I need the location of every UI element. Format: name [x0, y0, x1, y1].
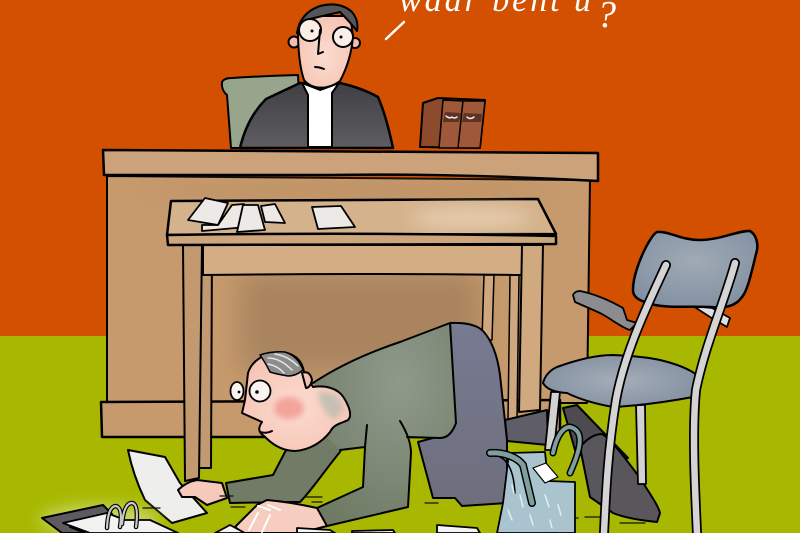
man cheek blush	[274, 397, 304, 419]
bench plinth	[101, 400, 560, 437]
sweater torso and near arm	[313, 323, 456, 526]
table top surface	[167, 199, 556, 235]
chair left tube	[604, 265, 666, 533]
man hair streaks	[268, 354, 298, 373]
judge ears	[288, 36, 360, 48]
trouser: main leg	[418, 323, 507, 506]
bench body	[107, 176, 590, 403]
chair right tube	[694, 263, 735, 533]
speech: judge question	[386, 0, 616, 39]
man head	[242, 352, 350, 451]
bag	[490, 427, 580, 533]
binder on floor	[40, 503, 178, 533]
man neck shading	[318, 392, 344, 420]
table rail	[203, 245, 522, 275]
judge face	[298, 16, 353, 88]
table front edge	[167, 234, 556, 245]
chair rear legs	[545, 392, 646, 484]
law books	[420, 98, 485, 148]
shadow under table	[240, 272, 480, 372]
man hair	[260, 352, 303, 376]
bag front strap	[490, 453, 532, 503]
bench top plank	[103, 150, 598, 181]
far arm	[226, 430, 345, 503]
man glasses	[230, 380, 270, 402]
bench shading	[150, 183, 550, 197]
background: orange wall	[0, 0, 800, 337]
near hand fingers	[249, 505, 280, 532]
bag contents	[533, 463, 558, 483]
judge white bib	[302, 83, 339, 147]
judge figure	[240, 4, 393, 148]
papers on table	[188, 198, 355, 232]
judge bench	[101, 150, 598, 437]
floor motion marks	[143, 496, 645, 523]
man mouth	[260, 431, 272, 433]
bag body	[497, 452, 575, 533]
judge gown	[240, 83, 393, 148]
chair back	[633, 231, 757, 307]
binder pages	[63, 513, 178, 533]
background: green floor	[0, 336, 800, 533]
papers on floor	[215, 525, 480, 533]
man ear	[302, 372, 312, 388]
binder rings	[107, 503, 137, 528]
document in hand	[128, 450, 207, 523]
chair seat	[543, 355, 697, 407]
binder cover	[42, 505, 112, 533]
judge nose and mouth	[315, 30, 324, 69]
sweater outlines	[313, 323, 456, 526]
chair armrest left	[573, 291, 637, 330]
chair	[543, 231, 757, 533]
shoe: front	[580, 434, 660, 522]
trouser: far leg	[505, 410, 548, 445]
man crawling	[178, 323, 660, 533]
judge glasses	[299, 19, 353, 47]
far hand	[178, 480, 227, 505]
bag rear handle	[553, 427, 580, 473]
table top highlight	[410, 208, 530, 228]
table back legs	[482, 275, 519, 420]
table front legs	[183, 245, 202, 481]
shoe: rear	[563, 405, 628, 470]
bag inner strap	[500, 457, 515, 493]
judge chair back	[222, 75, 300, 148]
judge hair	[297, 4, 357, 33]
near hand	[235, 500, 327, 533]
binder glow	[40, 506, 160, 533]
chair armrest right	[693, 306, 730, 327]
defendant table	[167, 199, 556, 481]
bag texture	[508, 485, 561, 528]
